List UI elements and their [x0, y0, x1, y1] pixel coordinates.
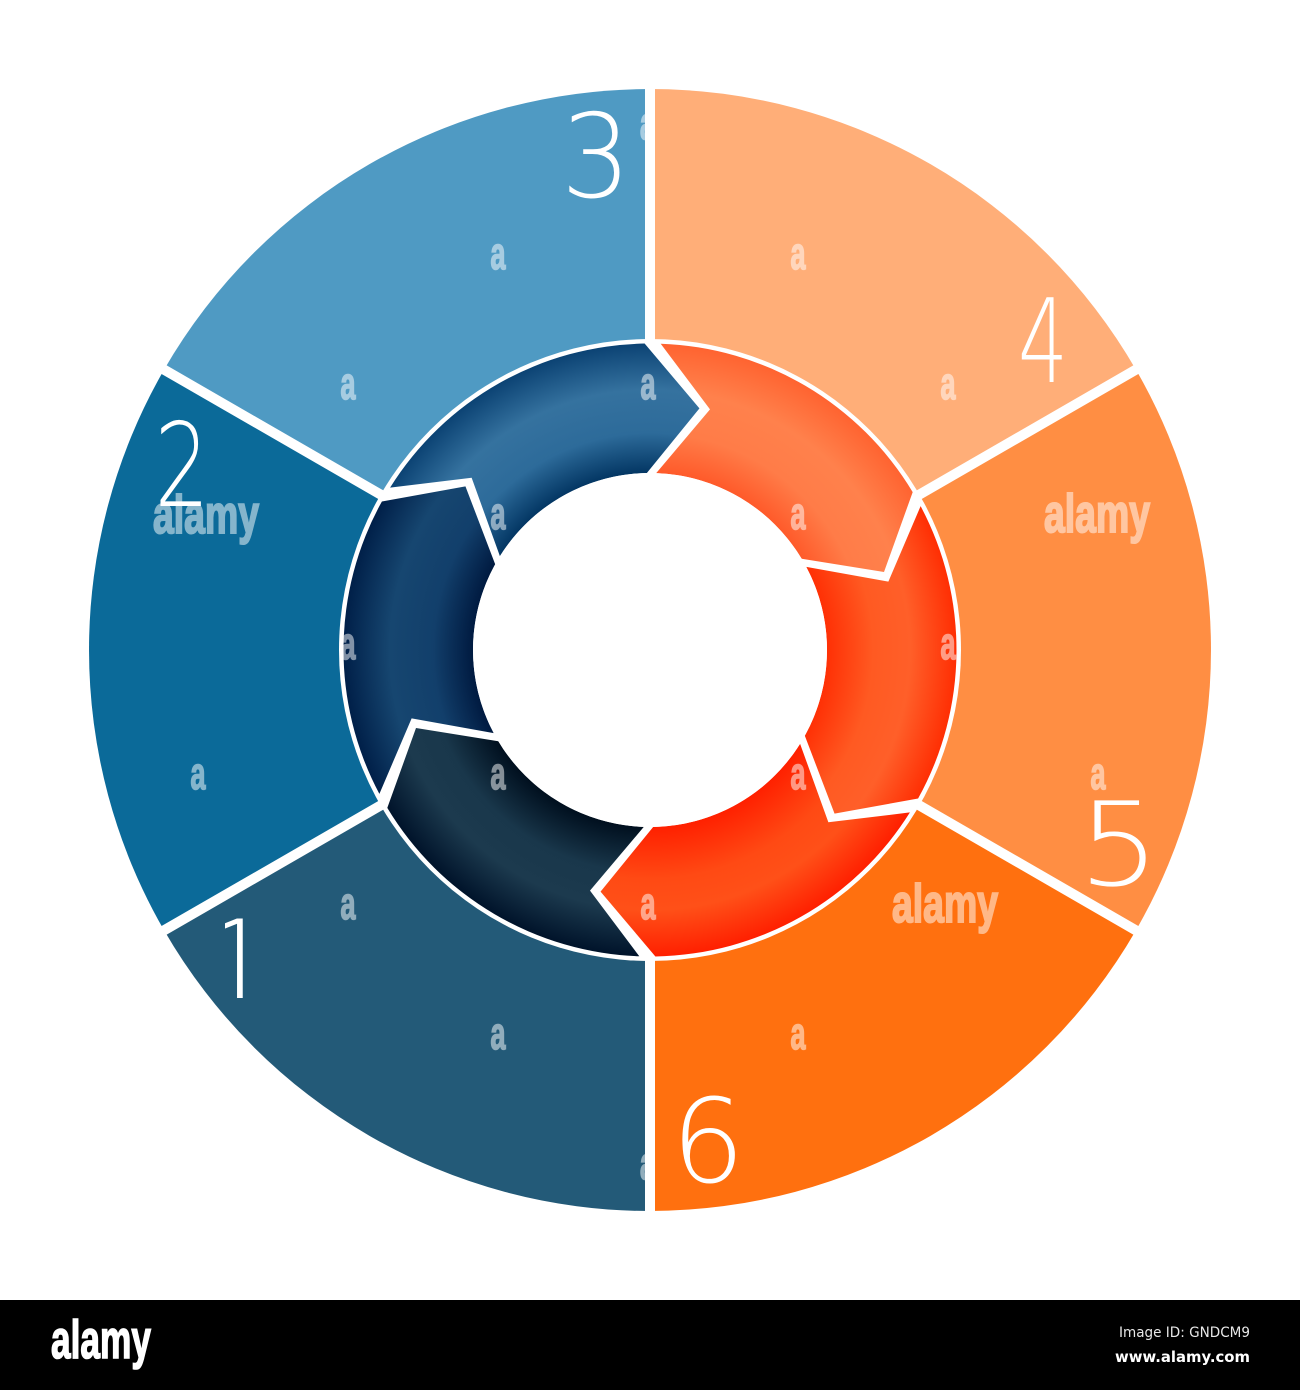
arrow 5 — [721, 502, 1047, 839]
arrow ring — [253, 269, 1047, 1031]
website: www.alamy.com — [1115, 1348, 1250, 1366]
outer segment 4 with number — [650, 89, 1136, 650]
small watermark letters: a — [640, 1138, 655, 1189]
small watermark letters: a — [640, 618, 656, 669]
small watermark letters: a — [640, 878, 656, 929]
arrow 2 — [253, 461, 579, 798]
small watermark letters: a — [640, 358, 656, 409]
small watermark letters — [190, 98, 1106, 1189]
arrow 4 — [656, 344, 913, 572]
centre white circle — [473, 473, 827, 827]
large watermark words — [153, 484, 1150, 934]
arrow 6 — [586, 694, 912, 1031]
footer bar — [0, 1300, 1300, 1390]
small watermark letters: a — [490, 488, 506, 539]
large watermark words: alamy — [1044, 484, 1150, 544]
outer segment 3 with number — [164, 0, 893, 650]
small watermark letters: a — [340, 358, 356, 409]
arrow 1 — [387, 728, 644, 956]
small watermark letters: a — [490, 748, 506, 799]
outer segment 6 with number: 6 — [671, 1075, 745, 1210]
small watermark letters: a — [190, 748, 206, 799]
inner ring backing disc — [339, 339, 961, 961]
outer segment 2 with number: 2 — [154, 399, 210, 534]
outer segment 5 with number — [650, 370, 1300, 1071]
small watermark letters: a — [790, 1008, 806, 1059]
arrow 3 — [388, 269, 714, 606]
large watermark words: alamy — [153, 485, 259, 545]
footer logo: alamy — [51, 1310, 151, 1370]
outer segment 1 with number — [166, 810, 645, 1211]
outer segment 6 with number — [407, 650, 1136, 1351]
outer segment 2 with number — [0, 229, 650, 931]
small watermark letters: a — [340, 878, 356, 929]
small watermark letters: a — [490, 228, 506, 279]
outer segment 1 with number: 1 — [201, 896, 275, 1031]
small watermark letters: a — [790, 748, 806, 799]
small watermark letters: a — [640, 98, 655, 149]
small watermark letters: a — [940, 618, 956, 669]
small watermark letters: a — [940, 358, 956, 409]
image id: Image ID: GNDCM9 — [1119, 1325, 1250, 1341]
outer segment 3 with number: 3 — [561, 90, 631, 225]
small watermark letters: a — [790, 228, 806, 279]
outer segment 4 with number: 4 — [1018, 275, 1068, 410]
small watermark letters: a — [340, 618, 356, 669]
large watermark words: alamy — [892, 874, 998, 934]
small watermark letters: a — [1090, 748, 1106, 799]
small watermark letters: a — [490, 1008, 506, 1059]
outer segment 5 with number: 5 — [1078, 778, 1160, 913]
small watermark letters: a — [790, 488, 806, 539]
